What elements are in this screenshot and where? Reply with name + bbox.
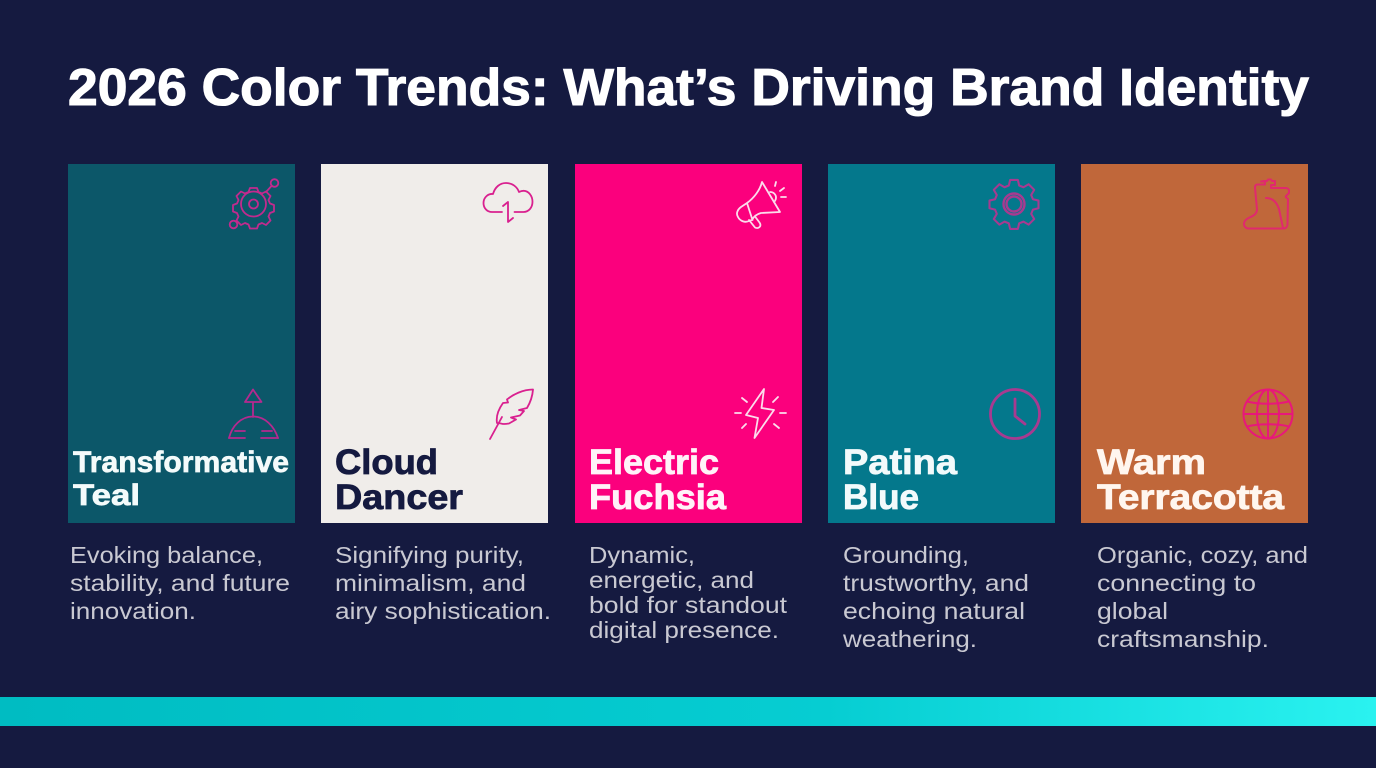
description: connecting to [1097, 570, 1256, 596]
swatch: Warm Terracotta [1081, 164, 1308, 523]
description: airy sophistication. [335, 598, 551, 624]
description: energetic, and [589, 567, 754, 593]
description: Dynamic, [589, 542, 695, 568]
panel: Patina Blue [828, 164, 1055, 652]
description: global [1097, 598, 1168, 624]
description: stability, and future [70, 570, 290, 596]
icon: cloud with bolt [484, 183, 532, 222]
heading: Electric [589, 443, 719, 482]
bottom accent bar [0, 697, 1376, 726]
description: minimalism, and [335, 570, 526, 596]
heading: Cloud [335, 443, 438, 482]
description: weathering. [842, 626, 977, 652]
heading: Terracotta [1097, 478, 1285, 517]
panel: Warm Terracotta [1081, 164, 1308, 652]
heading: Patina [843, 443, 958, 482]
icon: gear [989, 180, 1039, 229]
description: innovation. [70, 598, 196, 624]
panel: Cloud Dancer [321, 164, 551, 624]
icon: clay vessel [1244, 180, 1289, 228]
description: Grounding, [843, 542, 969, 568]
icon: gear network [230, 179, 278, 228]
heading: Dancer [335, 478, 463, 517]
heading: Fuchsia [589, 478, 727, 517]
title: 2026 Color Trends: What’s Driving Brand Identity [68, 59, 1309, 117]
description: Evoking balance, [70, 542, 263, 568]
heading: Teal [73, 479, 140, 512]
description: Organic, cozy, and [1097, 542, 1308, 568]
icon: clock [990, 390, 1040, 438]
swatch: Patina Blue [828, 164, 1055, 523]
icon: arrow on dome [229, 390, 278, 438]
icon: lightning bolt [735, 389, 786, 438]
icon: megaphone [737, 182, 786, 228]
swatch: Electric Fuchsia [575, 164, 802, 523]
heading: Warm [1097, 443, 1206, 482]
swatch: Cloud Dancer [321, 164, 548, 523]
heading: Transformative [73, 446, 289, 479]
icon: globe [1244, 390, 1292, 438]
description: craftsmanship. [1097, 626, 1269, 652]
icon: feather [490, 390, 533, 439]
panel: Electric Fuchsia [575, 164, 802, 643]
description: Signifying purity, [335, 542, 524, 568]
description: trustworthy, and [843, 570, 1029, 596]
heading: Blue [843, 478, 919, 517]
panel: Transformative Teal [68, 164, 295, 624]
swatch: Transformative Teal [68, 164, 295, 523]
description: digital presence. [589, 617, 779, 643]
description: echoing natural [843, 598, 1025, 624]
description: bold for standout [589, 592, 788, 618]
